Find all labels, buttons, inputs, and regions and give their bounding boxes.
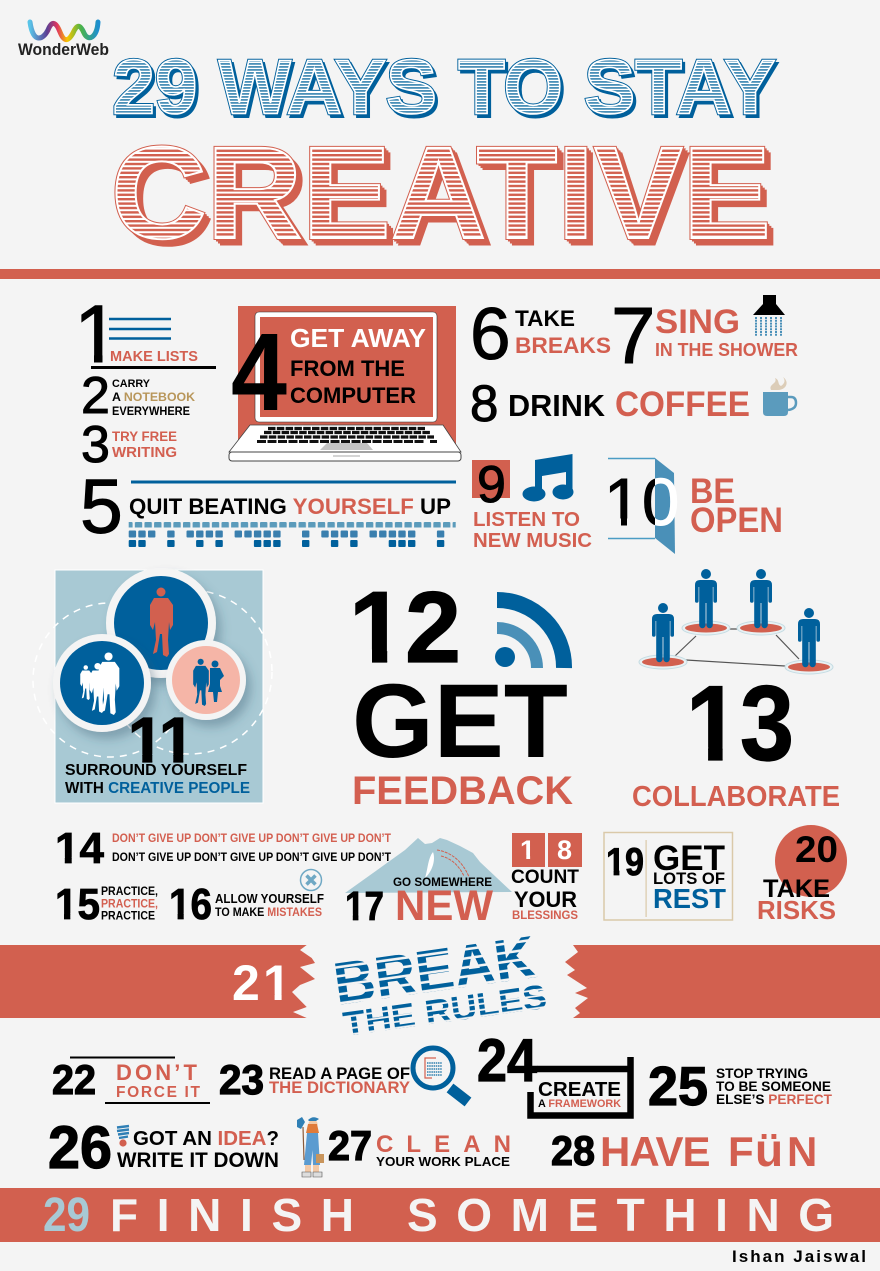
item 18: count your blessings: 1 xyxy=(520,835,535,865)
icon: person in top circle xyxy=(106,568,216,678)
item 22: don't force it: FORCE IT xyxy=(116,1084,201,1101)
item 15: practice: PRACTICE xyxy=(101,910,155,922)
panel: item 11 surround yourself: 11 xyxy=(128,704,195,776)
item 15: practice: PRACTICE, xyxy=(101,886,158,898)
item 6: take breaks: TAKE xyxy=(515,306,575,331)
item 21: break the rules band xyxy=(0,936,880,1035)
item 2: carry a notebook xyxy=(81,367,195,425)
item 26: got an idea: WRITE IT DOWN xyxy=(117,1149,279,1172)
item 25: stop trying to be someone else's perfect: STOP TRYING xyxy=(716,1066,808,1081)
item 6: take breaks xyxy=(470,294,611,375)
item 25: stop trying to be someone else's perfect: TO BE SOMEONE xyxy=(716,1079,831,1094)
item 7: sing in the shower xyxy=(611,291,798,380)
item 3: try free writing xyxy=(81,416,177,474)
item 28: have fun: ü xyxy=(755,1124,782,1176)
item 26: got an idea: GOT AN IDEA? xyxy=(133,1128,279,1150)
item 10: be open: OPEN xyxy=(690,501,783,540)
item 14: don't give up: 14 xyxy=(55,824,105,873)
icon: shower head xyxy=(753,295,785,315)
item 25: stop trying to be someone else's perfect: ELSE’S PERFECT xyxy=(716,1092,833,1107)
item 20: take risks: 20 xyxy=(795,829,838,870)
item 25: stop trying to be someone else's perfect: 25 xyxy=(648,1055,708,1117)
item 5: quit beating yourself up: 5 xyxy=(80,464,123,550)
icon: laptop screen xyxy=(255,312,437,422)
item 1: make lists xyxy=(81,305,216,369)
item 14: don't give up: DON’T GIVE UP DON’T GIVE UP DON’T GIVE UP DON’T xyxy=(112,852,391,864)
item 2: carry a notebook: EVERYWHERE xyxy=(112,406,190,418)
item 8: drink coffee: COFFEE xyxy=(615,385,750,424)
credit: Ishan Jaiswal xyxy=(732,1247,866,1266)
item 16: allow yourself to make mistakes: ALLOW YOURSELF xyxy=(215,891,324,906)
item 13: collaborate xyxy=(632,569,840,813)
icon: coffee cup xyxy=(763,392,788,416)
item 15: practice: PRACTICE, xyxy=(101,898,158,910)
item 20: take risks: TAKE xyxy=(763,875,830,903)
item 17: go somewhere new: GO SOMEWHERE xyxy=(393,877,492,889)
item 6: take breaks: BREAKS xyxy=(515,333,611,358)
item 17: go somewhere new xyxy=(345,838,512,920)
item 8: drink coffee: 8 xyxy=(470,375,498,432)
item 8: drink coffee: DRINK xyxy=(508,388,606,423)
item 9: listen to new music: NEW MUSIC xyxy=(473,529,592,552)
item 29: finish something band: SOMETHING xyxy=(407,1189,834,1241)
item 21: break the rules band: BREAK xyxy=(329,923,540,1018)
icon: cleaner figure xyxy=(297,1117,324,1177)
item 29: finish something band: 29 xyxy=(43,1189,90,1242)
item 27: clean your work place: CLEAN xyxy=(376,1131,511,1158)
item 6: take breaks: 6 xyxy=(470,294,511,375)
item 18: count your blessings: BLESSINGS xyxy=(512,910,578,922)
item 26: got an idea: 26 xyxy=(48,1114,112,1181)
item 14: don't give up xyxy=(58,832,391,864)
icon: magnifying glass xyxy=(413,1048,468,1102)
item 26: got an idea xyxy=(48,1114,279,1181)
item 24: create a framework: CREATE xyxy=(538,1078,621,1101)
icon: laptop base xyxy=(229,425,461,452)
item 18: count your blessings: 8 xyxy=(557,835,572,865)
panel: item 11 surround yourself xyxy=(33,568,272,803)
item 28: have fun: 28 xyxy=(551,1127,595,1174)
title: creative: CREATIVE xyxy=(115,123,775,270)
item 4: laptop get away from the computer: 4 xyxy=(231,311,287,434)
item 20: take risks xyxy=(757,825,847,925)
item 23: read a page of the dictionary xyxy=(219,1048,468,1103)
icon: light bulb xyxy=(117,1126,129,1147)
item 10: be open xyxy=(604,458,783,554)
item 24: create a framework: A FRAMEWORK xyxy=(538,1098,621,1110)
item 14: don't give up: DON’T GIVE UP DON’T GIVE UP DON’T GIVE UP DON’T xyxy=(112,833,391,845)
title: creative: CREATIVE xyxy=(111,119,771,266)
item 9: listen to new music: 9 xyxy=(477,456,506,514)
item 16: allow yourself to make mistakes: 16 xyxy=(169,880,212,929)
item 8: drink coffee xyxy=(470,375,796,432)
item 27: clean your work place: 27 xyxy=(328,1122,372,1169)
item 10: be open: 10 xyxy=(604,465,679,540)
item 2: carry a notebook: 2 xyxy=(81,367,110,425)
item 12: get feedback xyxy=(354,590,572,804)
item 19: get lots of rest: GET xyxy=(653,839,725,878)
icon: mistake x xyxy=(300,870,322,890)
icon: mountain xyxy=(345,838,512,893)
title: creative: CREATIVE xyxy=(111,119,771,266)
title: 29 ways to stay: 29 WAYS TO STAY xyxy=(112,44,776,130)
item 4: laptop get away from the computer: COMPUTER xyxy=(290,383,416,408)
item 21: break the rules band: THE RULES xyxy=(341,978,549,1044)
item 7: sing in the shower: IN THE SHOWER xyxy=(655,340,798,360)
icon: music note xyxy=(522,454,574,502)
title: 29 ways to stay: 29 WAYS TO STAY xyxy=(112,44,776,130)
item 4: laptop get away from the computer xyxy=(229,306,461,461)
chart: equalizer blocks xyxy=(129,520,456,547)
title: creative: CREATIVE xyxy=(117,125,777,272)
item 9: listen to new music xyxy=(472,454,592,552)
item 4: laptop get away from the computer: FROM THE xyxy=(290,356,405,381)
item 2: carry a notebook: CARRY xyxy=(112,378,151,390)
item 3: try free writing: 3 xyxy=(81,416,110,474)
item 19: get lots of rest xyxy=(604,832,732,920)
icon: family in left circle xyxy=(53,634,151,732)
icon: rainbow wave xyxy=(30,22,98,40)
item 17: go somewhere new: NEW xyxy=(395,882,493,930)
item 22: don't force it xyxy=(52,1056,210,1104)
item 15: practice: 15 xyxy=(55,880,100,929)
item 24: create a framework: 24 xyxy=(477,1027,538,1094)
item 2: carry a notebook: A NOTEBOOK xyxy=(112,390,195,404)
item 28: have fun: F xyxy=(728,1128,753,1175)
item 1: make lists: 1 xyxy=(74,289,120,380)
icon: rss feed xyxy=(495,600,564,668)
item 10: be open: BE xyxy=(690,472,735,511)
panel: item 11 surround yourself: SURROUND YOURSELF xyxy=(65,762,247,779)
item 12: get feedback: FEEDBACK xyxy=(352,769,573,813)
item 7: sing in the shower: SING xyxy=(655,303,740,341)
item 28: have fun: N xyxy=(787,1128,816,1175)
item 5: quit beating yourself up: QUIT BEATING YOURSELF UP xyxy=(129,494,451,519)
item 19: get lots of rest: LOTS OF xyxy=(653,869,725,888)
item 24: create a framework xyxy=(477,1027,630,1116)
icon: couple in right circle xyxy=(166,640,246,720)
icon: open door xyxy=(608,458,655,538)
item 16: allow yourself to make mistakes: TO MAKE MISTAKES xyxy=(215,905,322,919)
icon: list lines xyxy=(109,319,171,338)
item 23: read a page of the dictionary: 23 xyxy=(219,1056,264,1103)
item 3: try free writing: WRITING xyxy=(112,444,177,461)
title: 29 ways to stay: 29 WAYS TO STAY xyxy=(115,48,778,134)
item 20: take risks: RISKS xyxy=(757,895,836,925)
item 23: read a page of the dictionary: READ A PAGE OF xyxy=(269,1065,410,1083)
item 12: get feedback: 12 xyxy=(349,572,461,684)
item 18: count your blessings xyxy=(511,833,582,922)
item 27: clean your work place xyxy=(297,1117,511,1177)
logo: WonderWeb xyxy=(18,22,109,59)
item 16: allow yourself to make mistakes xyxy=(171,868,324,920)
item 17: go somewhere new: 17 xyxy=(345,883,384,929)
panel: item 11 surround yourself: WITH CREATIVE PEOPLE xyxy=(65,780,250,797)
item 3: try free writing: TRY FREE xyxy=(112,429,177,444)
item 1: make lists: MAKE LISTS xyxy=(110,348,198,365)
item 4: laptop get away from the computer: GET AWAY xyxy=(290,325,426,353)
item 19: get lots of rest: REST xyxy=(653,883,726,914)
item 15: practice xyxy=(57,886,158,920)
item 7: sing in the shower: 7 xyxy=(611,291,656,380)
item 18: count your blessings: COUNT xyxy=(511,867,579,888)
item 22: don't force it: DON’T xyxy=(116,1060,198,1085)
item 5: quit beating yourself up xyxy=(80,464,456,550)
item 22: don't force it: 22 xyxy=(52,1056,96,1103)
item 21: break the rules band: 21 xyxy=(232,955,291,1011)
item 12: get feedback: GET xyxy=(352,663,568,780)
item 27: clean your work place: YOUR WORK PLACE xyxy=(376,1154,510,1169)
item 13: collaborate: 13 xyxy=(686,663,794,783)
item 25: stop trying to be someone else's perfect xyxy=(648,1055,833,1117)
item 10: be open: 10 xyxy=(604,465,679,540)
item 19: get lots of rest: 19 xyxy=(606,841,644,884)
item 23: read a page of the dictionary: THE DICTIONARY xyxy=(269,1078,411,1097)
item 18: count your blessings: YOUR xyxy=(514,887,577,912)
item 28: have fun xyxy=(551,1124,816,1176)
title: creative: CREATIVE xyxy=(113,121,773,268)
item 29: finish something band xyxy=(0,1188,880,1242)
item 29: finish something band: FINISH xyxy=(110,1189,354,1241)
item 13: collaborate: COLLABORATE xyxy=(632,781,840,813)
chart: people network xyxy=(639,569,833,674)
logo: WonderWeb: WonderWeb xyxy=(18,40,109,59)
item 9: listen to new music: LISTEN TO xyxy=(473,508,580,531)
item 28: have fun: HAVE xyxy=(600,1128,710,1175)
